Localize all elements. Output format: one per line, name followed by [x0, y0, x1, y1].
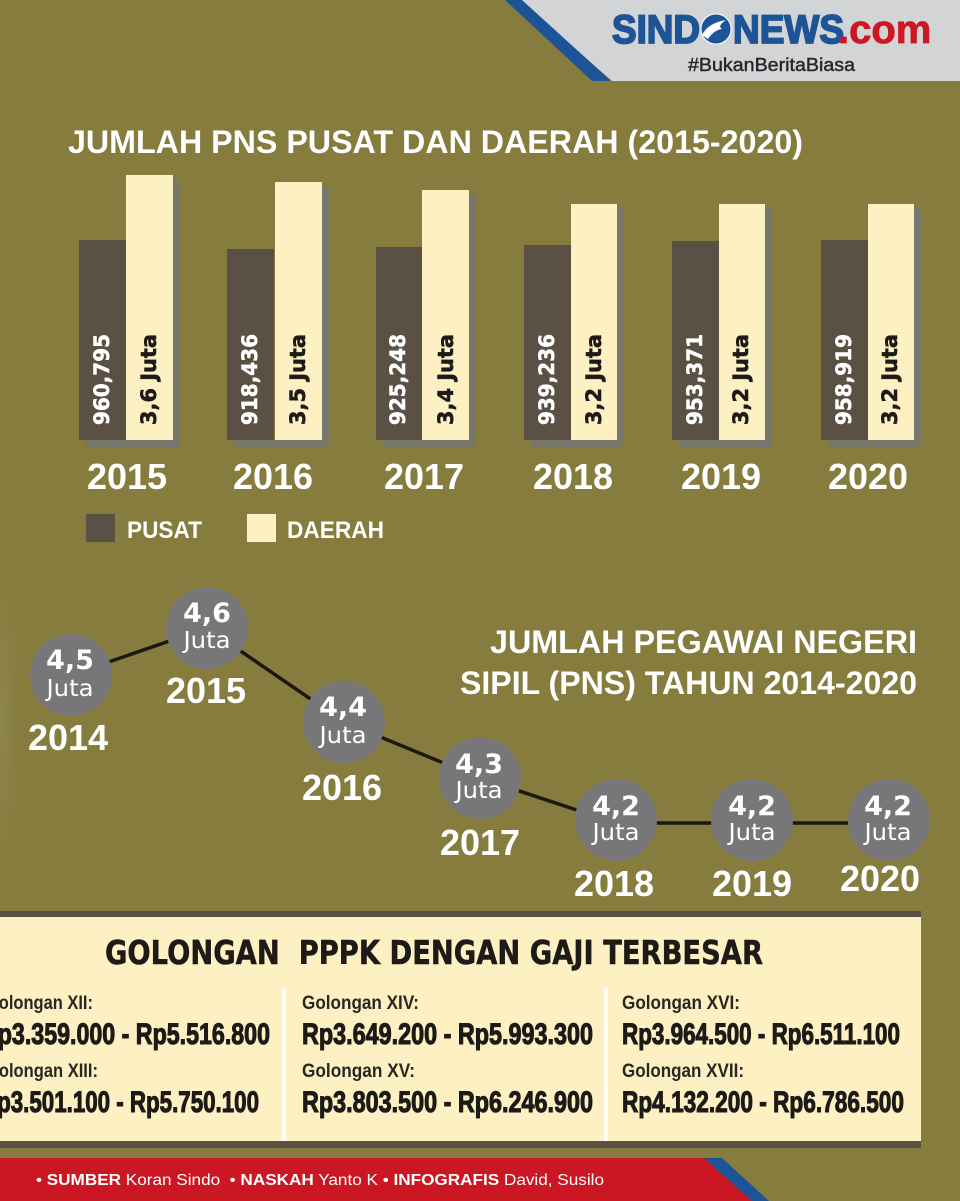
- logo: SINDONEWS.com: SIND: [612, 8, 700, 52]
- credits: • SUMBER Koran Sindo • NASKAH Yanto K • INFOGRAFIS David, Susilo: [36, 1172, 604, 1189]
- point 2018: [574, 779, 657, 904]
- point 2017: 2017: [440, 822, 520, 863]
- title: bar chart: JUMLAH PNS PUSAT DAN DAERAH (2015-2020): [68, 124, 803, 160]
- point 2015: [166, 587, 248, 711]
- point 2020: [840, 779, 930, 899]
- legend: [86, 514, 384, 544]
- point 2016: Juta: [317, 723, 366, 749]
- column 2: Golongan XIV:: [302, 993, 419, 1014]
- bars 2020: 3,2 Juta: [878, 334, 902, 425]
- year labels: 2015: [87, 456, 167, 497]
- legend: DAERAH: [287, 517, 384, 544]
- bar chart: PNS pusat dan daerah: [79, 175, 921, 497]
- tagline: #BukanBeritaBiasa: [688, 55, 856, 75]
- bars 2018: 939,236: [535, 334, 559, 425]
- bars 2018: [524, 204, 624, 447]
- legend: PUSAT: [127, 517, 202, 544]
- column 2: Golongan XV:: [302, 1061, 415, 1082]
- logo: SINDONEWS.com: NEWS: [733, 8, 844, 52]
- point 2017: Juta: [453, 778, 502, 804]
- point 2019: 2019: [712, 863, 792, 904]
- title: line chart: SIPIL (PNS) TAHUN 2014-2020: [460, 665, 917, 701]
- bars 2017: [376, 190, 476, 447]
- bars 2017: 925,248: [386, 334, 410, 425]
- panel: golongan PPPK: [0, 911, 921, 1148]
- point 2018: 2018: [574, 863, 654, 904]
- column 2: [302, 993, 593, 1119]
- point 2019: [711, 779, 793, 904]
- point 2016: 4,4: [319, 692, 367, 723]
- point 2016: 2016: [302, 767, 382, 808]
- point 2016: [302, 681, 385, 808]
- bars 2018: 3,2 Juta: [582, 334, 606, 425]
- header logo banner: [505, 0, 960, 81]
- bars 2020: 958,919: [832, 334, 856, 425]
- point 2015: Juta: [181, 628, 230, 654]
- point 2018: 4,2: [592, 791, 640, 822]
- point 2019: 4,2: [728, 791, 776, 822]
- point 2018: Juta: [590, 820, 640, 846]
- year labels: [87, 456, 908, 497]
- logo: SINDONEWS.com: .com: [838, 8, 931, 52]
- point 2017: [439, 737, 521, 863]
- line chart: jumlah PNS 2014-2020: [28, 587, 930, 904]
- column 2: Rp3.803.500 - Rp6.246.900: [302, 1086, 593, 1119]
- bars 2016: 918,436: [238, 334, 262, 425]
- year labels: 2019: [681, 456, 761, 497]
- bars 2020: [821, 204, 921, 447]
- year labels: 2016: [233, 456, 313, 497]
- panel heading: GOLONGAN PPPK DENGAN GAJI TERBESAR: [105, 933, 763, 972]
- point 2019: Juta: [726, 820, 776, 846]
- point 2014: Juta: [44, 676, 94, 702]
- point 2014: [28, 634, 112, 758]
- year labels: 2017: [384, 456, 464, 497]
- point 2020: 2020: [840, 858, 920, 899]
- title: line chart: JUMLAH PEGAWAI NEGERI: [490, 624, 917, 660]
- column 3: Golongan XVI:: [622, 993, 740, 1014]
- title: line chart: [460, 624, 917, 701]
- bars 2019: [672, 204, 772, 447]
- point 2014: 4,5: [46, 645, 94, 676]
- footer credits bar: [0, 1158, 769, 1201]
- bars 2015: 3,6 Juta: [137, 334, 161, 425]
- column 3: [622, 993, 904, 1119]
- point 2014: 2014: [28, 717, 108, 758]
- point 2017: 4,3: [455, 749, 503, 780]
- bars 2015: [79, 175, 180, 447]
- bars 2016: 3,5 Juta: [286, 334, 310, 425]
- point 2015: 4,6: [183, 598, 231, 629]
- bars 2016: [227, 182, 329, 447]
- bars 2019: 3,2 Juta: [729, 334, 753, 425]
- logo: SINDONEWS.com: [612, 8, 931, 52]
- bars 2019: 953,371: [683, 334, 707, 425]
- column 1: [0, 993, 270, 1119]
- point 2020: Juta: [862, 820, 912, 846]
- point 2015: 2015: [166, 670, 246, 711]
- point 2020: 4,2: [864, 791, 912, 822]
- bars 2017: 3,4 Juta: [434, 334, 458, 425]
- column 2: Rp3.649.200 - Rp5.993.300: [302, 1018, 593, 1051]
- year labels: 2018: [533, 456, 613, 497]
- bars 2015: 960,795: [90, 334, 114, 425]
- year labels: 2020: [828, 456, 908, 497]
- column 3: Golongan XVII:: [622, 1061, 744, 1082]
